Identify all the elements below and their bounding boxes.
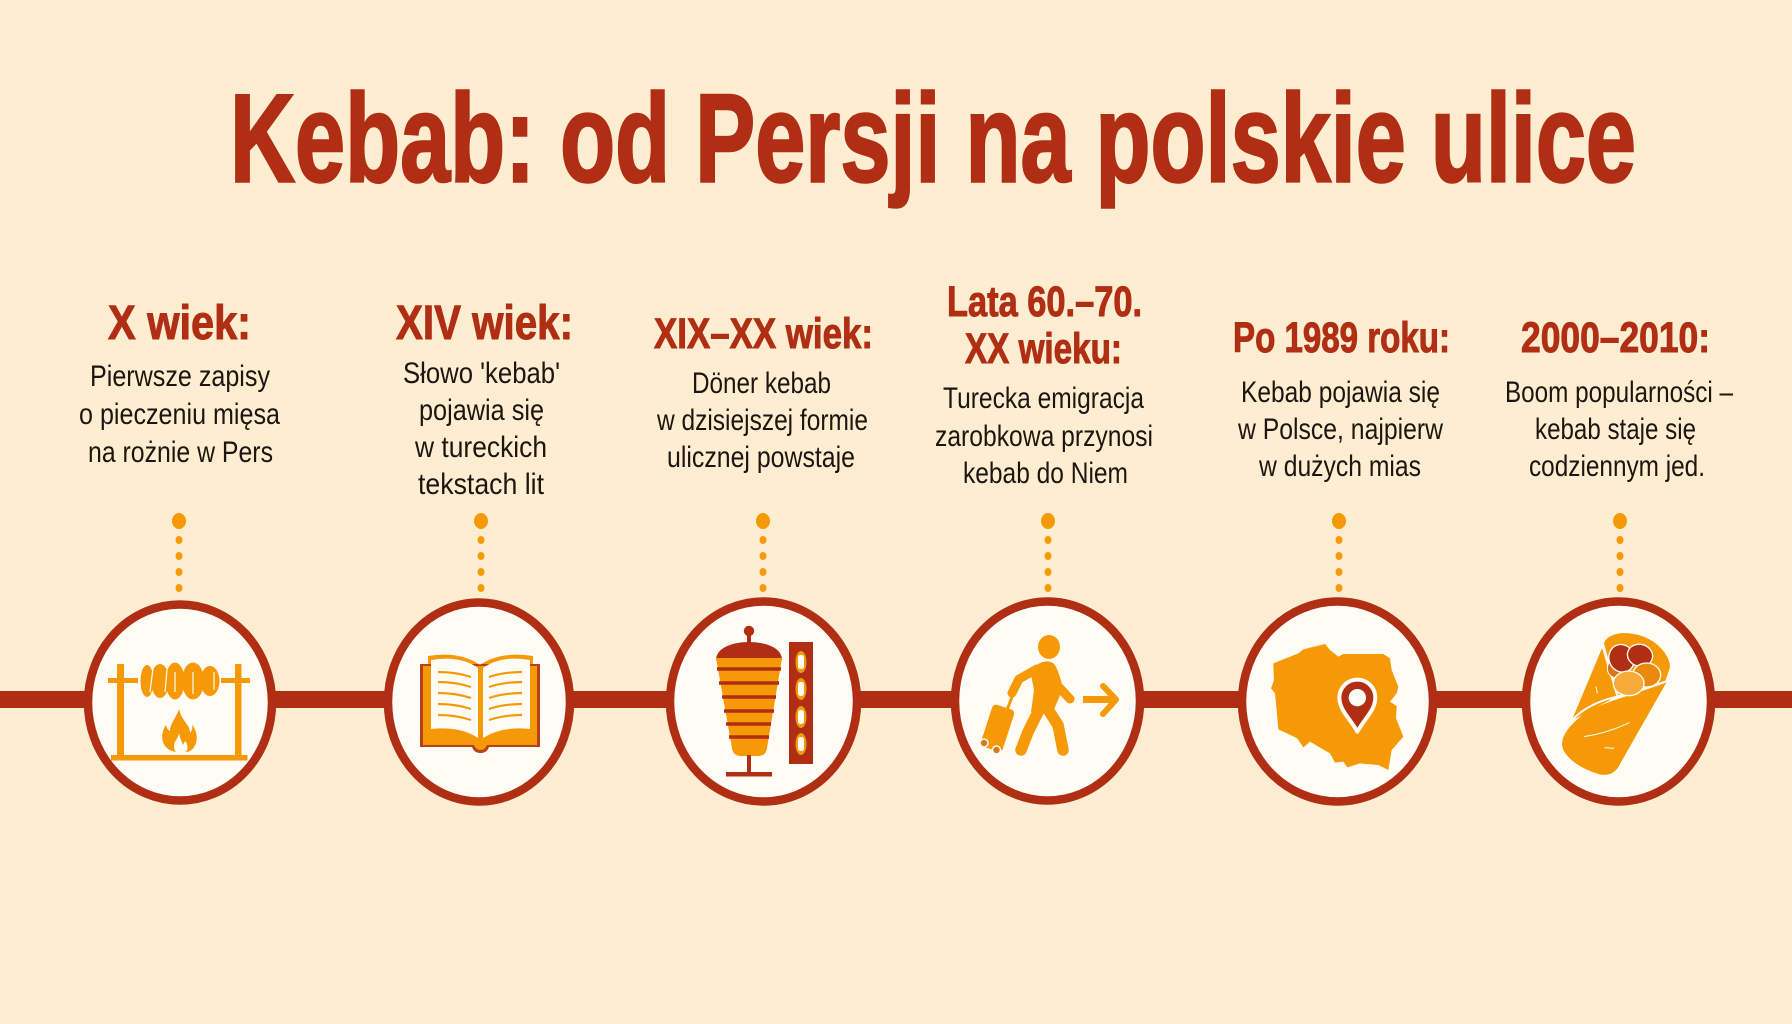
panel: XIX–XX wiek: [654, 310, 873, 802]
dotted connector: [172, 513, 186, 592]
heading: X wiek: X wiek:: [108, 297, 251, 350]
dotted connector: [1332, 513, 1346, 592]
text block: Po 1989 roku: w Polsce, najpierw: [1237, 413, 1443, 446]
text block: Po 1989 roku: Kebab pojawia się: [1241, 376, 1440, 409]
text block: 2000–2010: Boom popularności –: [1505, 376, 1733, 409]
panel: Po 1989 roku: [1233, 314, 1450, 802]
dotted connector: [1613, 513, 1627, 592]
icon: spit roast over fire: [108, 662, 250, 760]
text block: X wiek: [79, 360, 280, 469]
panel: 2000–2010: [1505, 314, 1733, 802]
text block: Po 1989 roku: [1237, 376, 1443, 483]
text block: X wiek: o pieczeniu mięsa: [79, 398, 280, 431]
icon circle: [955, 602, 1140, 800]
heading: XIX–XX wiek: XIX–XX wiek:: [654, 310, 873, 358]
heading: Po 1989 roku: Po 1989 roku:: [1233, 314, 1450, 362]
heading: Lata 60.–70. XX wieku: XX wieku:: [965, 325, 1122, 373]
panel: XIV wiek: [388, 297, 573, 802]
text block: XIV wiek: Słowo 'kebab': [403, 357, 560, 390]
text block: Lata 60.–70.: kebab do Niem: [963, 457, 1128, 490]
text block: XIX–XX wiek: [656, 367, 868, 474]
text block: Lata 60.–70.: [935, 382, 1153, 490]
text block: Lata 60.–70.: Turecka emigracja: [943, 382, 1144, 415]
text block: Po 1989 roku: w dużych mias: [1258, 450, 1421, 483]
dotted connector: [474, 513, 488, 592]
dotted connector: [1041, 513, 1055, 592]
text block: XIX–XX wiek: ulicznej powstaje: [667, 441, 855, 474]
icon circle: [670, 602, 857, 802]
text block: XIV wiek: tekstach lit: [418, 468, 545, 501]
icon circle: [88, 604, 272, 800]
icon circle: [1242, 602, 1433, 802]
icon: open book: [420, 655, 540, 753]
text block: XIV wiek: pojawia się: [419, 394, 544, 427]
text block: X wiek: Pierwsze zapisy: [90, 360, 270, 393]
text block: X wiek: na rożnie w Pers: [88, 436, 273, 469]
timeline bar: [0, 691, 1792, 708]
text block: 2000–2010: [1505, 376, 1733, 483]
text block: XIV wiek: [403, 357, 560, 501]
panel: Lata 60.–70. XX wieku: [935, 278, 1153, 800]
icon: traveller with suitcase: [980, 635, 1116, 754]
text block: XIV wiek: w tureckich: [414, 431, 547, 464]
icon: map of Poland with pin: [1271, 644, 1403, 770]
heading: XIV wiek: XIV wiek:: [396, 297, 573, 350]
icon circle: [1526, 602, 1711, 802]
heading: Lata 60.–70. XX wieku: [947, 278, 1142, 373]
text block: Lata 60.–70.: zarobkowa przynosi: [935, 420, 1153, 453]
heading: 2000–2010: 2000–2010:: [1521, 314, 1710, 362]
heading: Lata 60.–70. XX wieku: Lata 60.–70.: [947, 278, 1142, 326]
icon circle: [388, 602, 570, 802]
icon: kebab wrap: [1562, 633, 1670, 775]
text block: XIX–XX wiek: Döner kebab: [692, 367, 831, 400]
panel: X wiek: [79, 297, 280, 800]
icon: doner spit and heater: [716, 626, 813, 776]
dotted connector: [756, 513, 770, 592]
text block: 2000–2010: kebab staje się: [1535, 413, 1696, 446]
text block: 2000–2010: codziennym jed.: [1529, 450, 1705, 483]
text block: XIX–XX wiek: w dzisiejszej formie: [656, 404, 868, 437]
